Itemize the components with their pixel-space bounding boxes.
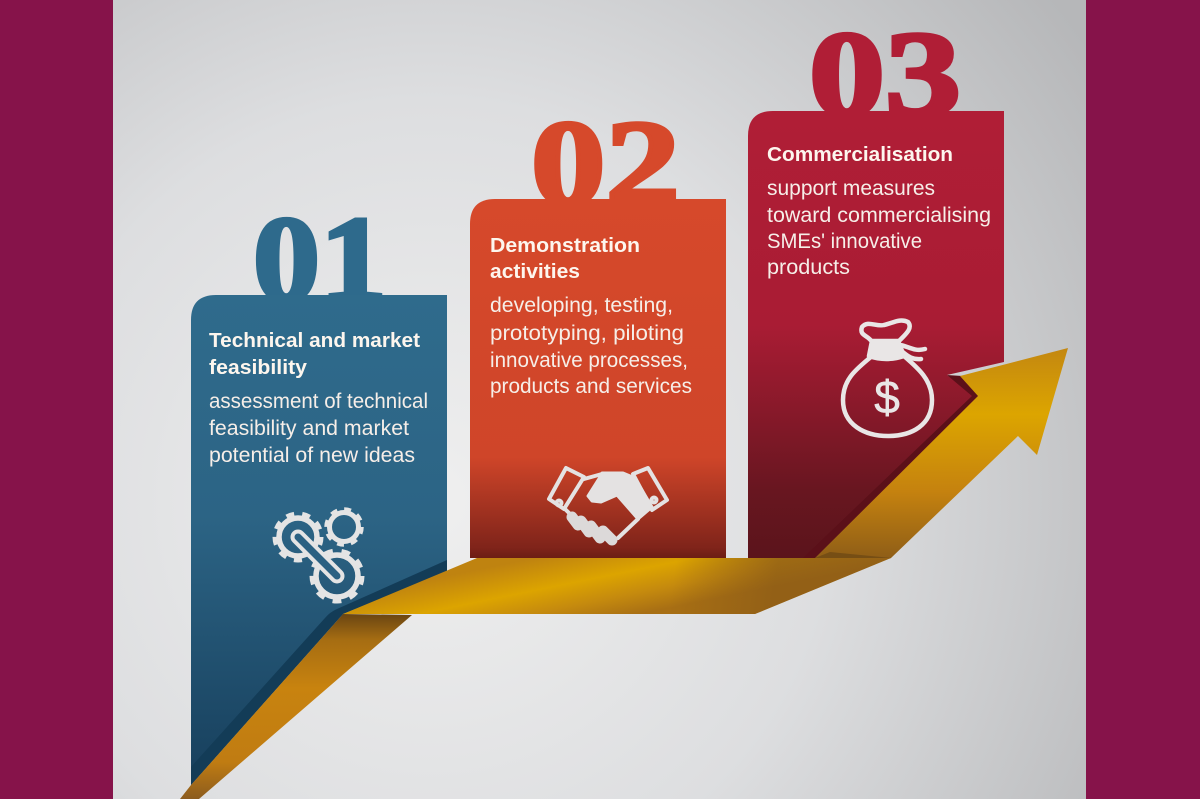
panel: step 02 demonstration activities [470,199,726,558]
heading: technical and market feasibility [209,330,420,379]
body text: commercialisation: toward commercialising [767,204,991,227]
body text: commercialisation: products [767,256,850,279]
icon: money bag: $ [874,371,900,423]
arrow: middle band [343,558,891,614]
fold shadow under head [815,552,891,558]
arrow: head and upper shaft [815,348,1068,558]
body text: demonstration activities: developing, testing, [490,294,673,317]
heading: technical and market feasibility: feasibility [209,357,308,379]
heading: technical and market feasibility: Technical and market [209,330,420,352]
right maroon band [1086,0,1200,799]
icon: gears [275,510,362,601]
arrow: lower fold [180,614,412,799]
body text: demonstration activities [490,294,692,398]
panel: step 01 technical and market feasibility [191,295,447,785]
heading: demonstration activities [490,235,640,283]
body text: commercialisation: support measures [767,177,935,200]
arrow: rising gold ribbon [180,348,1068,799]
body text: technical and market feasibility: potential of new ideas [209,444,415,467]
body text: technical and market feasibility: assessment of technical [209,390,428,413]
panel: step 03 commercialisation [748,111,1004,558]
body text: demonstration activities: innovative processes, [490,349,688,372]
step 03: number: 03 [809,7,961,142]
body text: commercialisation: SMEs' innovative [767,230,922,253]
body text: commercialisation [767,177,991,279]
body text: demonstration activities: products and services [490,375,692,398]
body text: demonstration activities: prototyping, piloting [490,322,684,345]
step 01: number: 01 [253,192,387,327]
body text: technical and market feasibility [209,390,428,467]
step 02: number: 02 [531,96,680,231]
body text: technical and market feasibility: feasibility and market [209,417,409,440]
icon: money bag [843,320,932,436]
icon: handshake [549,468,667,540]
heading: demonstration activities: activities [490,261,580,283]
heading: commercialisation: Commercialisation [767,144,953,166]
heading: demonstration activities: Demonstration [490,235,640,257]
left maroon band [0,0,113,799]
